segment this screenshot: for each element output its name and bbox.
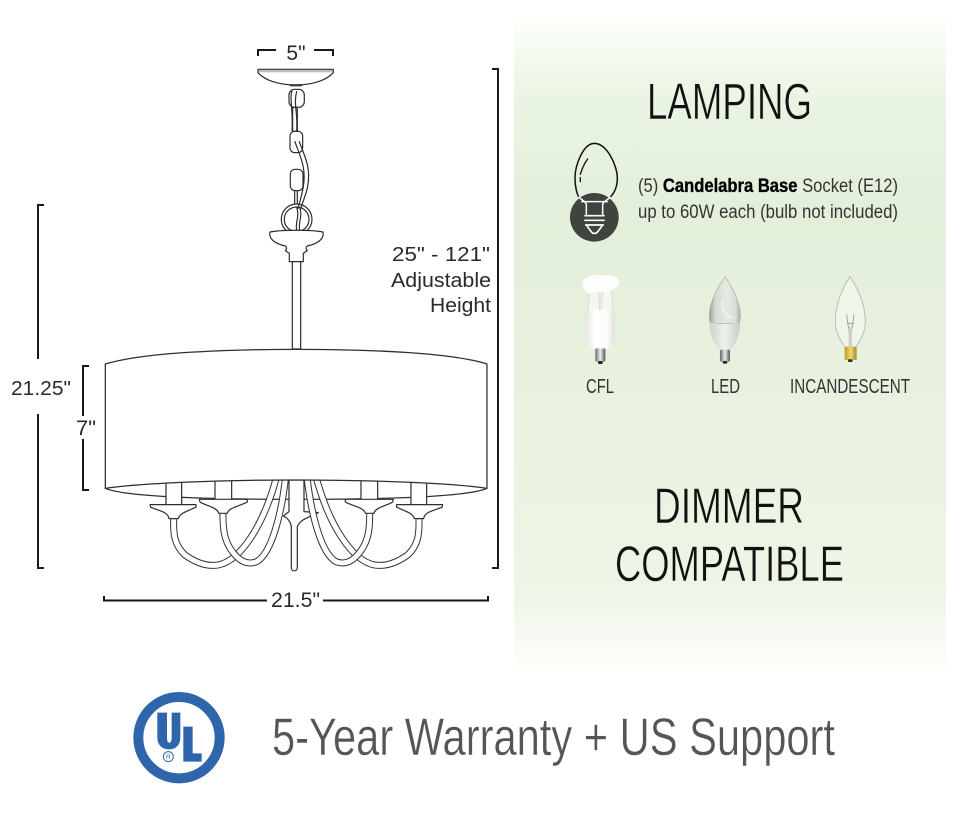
bulb: LED — [709, 277, 740, 364]
dimension: adjustable height — [391, 69, 498, 568]
heading: dimmer compatible — [615, 478, 844, 592]
chandelier lower: arms and drum shade — [105, 349, 487, 571]
panel: lamping background — [514, 14, 946, 674]
dimension: shade height: 7" — [76, 417, 96, 440]
drum shade — [105, 349, 487, 488]
dimension: adjustable height: Height — [430, 294, 491, 317]
icon: UL logo: R — [166, 754, 171, 761]
bulb labels: CFL — [586, 376, 614, 398]
dimension: width — [104, 589, 488, 612]
heading: dimmer compatible: DIMMER — [654, 478, 804, 534]
icon: candelabra bulb — [570, 143, 619, 242]
heading: dimmer compatible: COMPATIBLE — [615, 536, 844, 592]
ceiling canopy — [258, 69, 333, 86]
dimension: overall height — [11, 205, 71, 568]
stem — [292, 262, 301, 349]
dimension: canopy width — [258, 42, 333, 65]
chandelier upper: canopy, chain and stem — [258, 69, 333, 349]
socket description — [638, 176, 898, 223]
right arms — [307, 477, 443, 565]
bulb: incandescent — [835, 277, 865, 362]
heading: lamping: LAMPING — [647, 73, 812, 130]
dimension: width: 21.5" — [271, 589, 320, 612]
loop cup — [270, 230, 323, 262]
dimension: canopy width: 5" — [286, 42, 306, 65]
chain — [289, 89, 309, 208]
bulb: CFL — [583, 275, 619, 364]
dimension: adjustable height: Adjustable — [391, 269, 491, 292]
dimension: adjustable height: 25" - 121" — [392, 243, 490, 266]
bulb labels: INCANDESCENT — [790, 376, 910, 398]
hanging loop — [281, 204, 312, 235]
dimension: shade height — [76, 366, 96, 490]
left arms — [150, 477, 286, 565]
center finial — [283, 480, 318, 571]
bulb labels — [586, 376, 910, 398]
socket description: up to 60W each (bulb not included) — [638, 202, 898, 223]
bulb labels: LED — [711, 376, 740, 398]
dimension: overall height: 21.25" — [11, 378, 71, 400]
socket description: (5) Candelabra Base Socket (E12) — [638, 176, 898, 197]
shade bottom rim — [105, 488, 487, 499]
icon: UL logo — [138, 697, 220, 778]
